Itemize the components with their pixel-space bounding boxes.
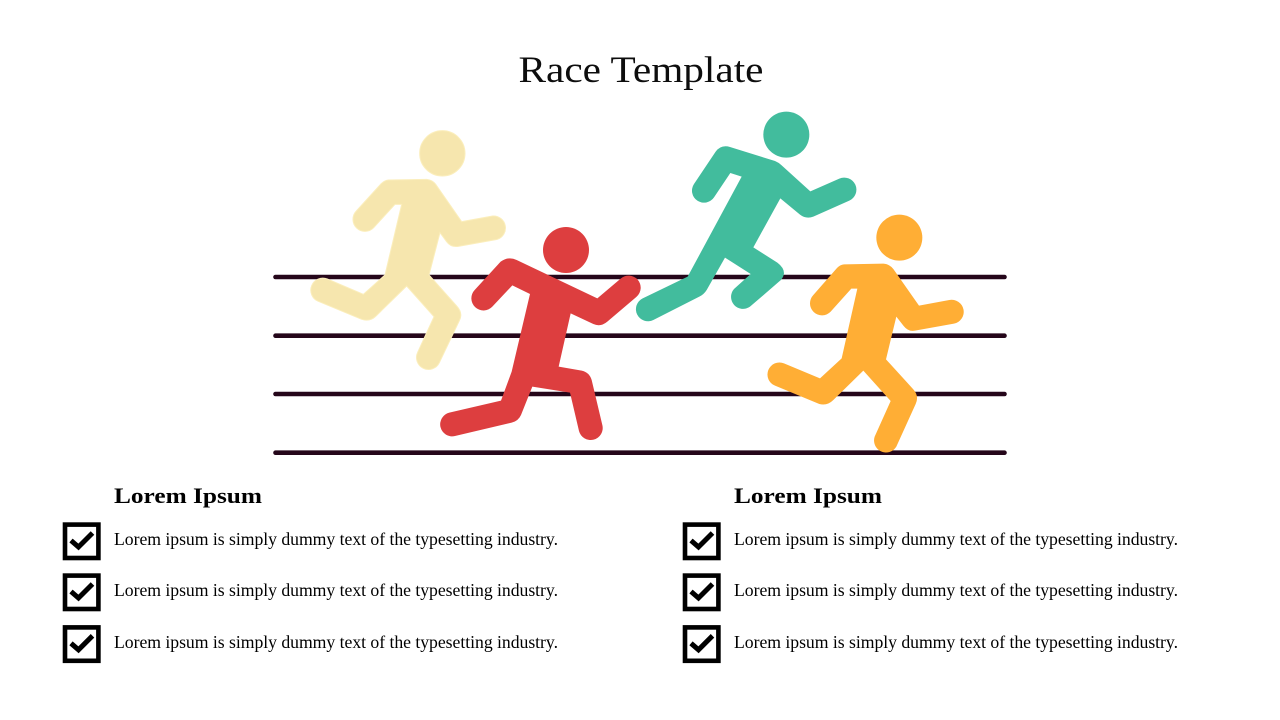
left item 3 [65,627,558,661]
right item 3 [685,627,1178,661]
right item 3: Lorem ipsum is simply dummy text of the typesetting industry. [734,632,1178,652]
left item 1: Lorem ipsum is simply dummy text of the typesetting industry. [114,529,558,549]
right item 2 [685,576,1178,609]
runner: orange [767,215,964,453]
left item 2 [65,576,558,609]
left item 2: Lorem ipsum is simply dummy text of the typesetting industry. [114,580,558,600]
left heading: Lorem Ipsum [114,483,262,508]
left item 1 [65,525,558,558]
title: Race Template [518,50,764,91]
right column [685,483,1178,661]
runner: pale yellow [311,131,505,369]
left column [65,483,558,661]
left item 3: Lorem ipsum is simply dummy text of the typesetting industry. [114,632,558,652]
right item 1 [685,525,1178,558]
runner: green [636,112,856,321]
right item 1: Lorem ipsum is simply dummy text of the typesetting industry. [734,529,1178,549]
runner: red [440,227,641,440]
track lines [276,277,1004,453]
right heading: Lorem Ipsum [734,483,882,508]
right item 2: Lorem ipsum is simply dummy text of the typesetting industry. [734,580,1178,600]
